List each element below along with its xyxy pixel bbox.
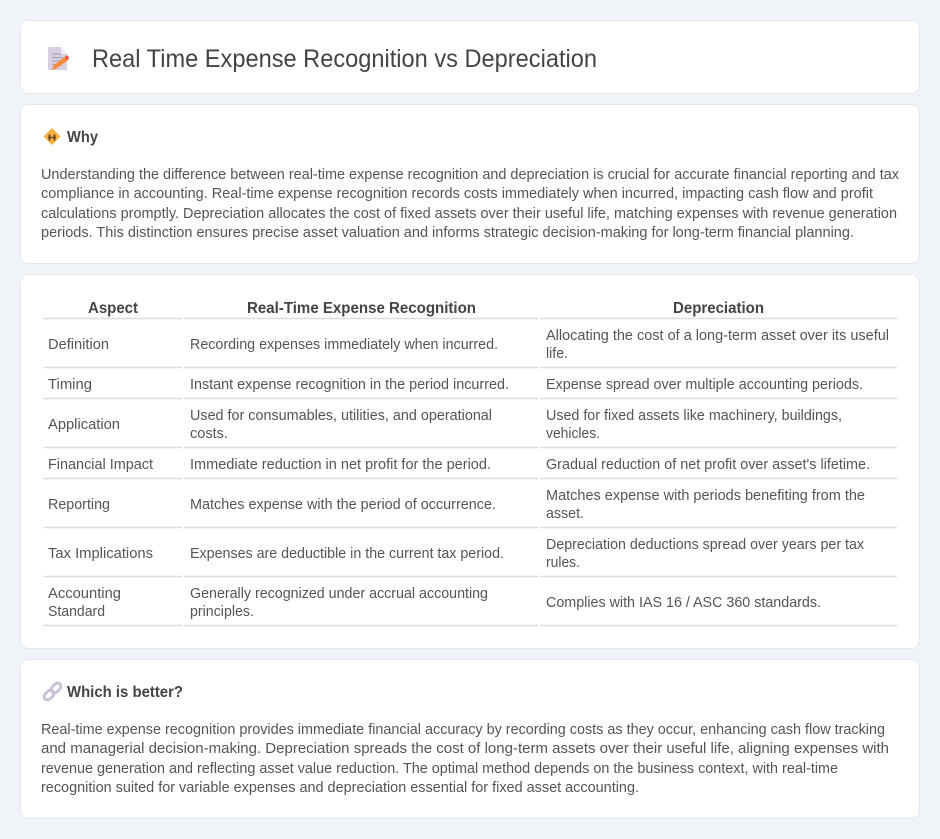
row: timing: Timing <box>48 377 92 393</box>
panel: title card <box>20 20 920 94</box>
row: definition <box>43 328 897 368</box>
text block: why <box>41 167 900 241</box>
row: financial impact: Immediate reduction in net profit for the period. <box>190 457 491 473</box>
row: tax implications: Tax Implications <box>48 546 153 562</box>
row: tax implications: Expenses are deductible in the current tax period. <box>190 546 504 562</box>
row: application: costs. <box>190 426 228 442</box>
panel: comparison table <box>20 274 920 648</box>
text block: which is better: and managerial decision-making. Depreciation spreads the cost of long-term assets over their useful life, aligning expenses with <box>41 741 889 757</box>
row: application <box>43 408 897 448</box>
text block: which is better: Real-time expense recognition provides immediate financial accuracy by recording costs as they occur, enhancing cash flow tracking <box>41 722 885 738</box>
panel: why <box>20 104 920 264</box>
row: financial impact: Financial Impact <box>48 457 153 473</box>
row: timing: Expense spread over multiple accounting periods. <box>546 377 863 393</box>
row: reporting: Matches expense with the period of occurrence. <box>190 497 496 513</box>
text block: which is better <box>41 722 889 796</box>
row: financial impact: Gradual reduction of net profit over asset's lifetime. <box>546 457 870 473</box>
row: reporting: Reporting <box>48 497 110 513</box>
row: definition: Definition <box>48 337 109 353</box>
title: Real Time Expense Recognition vs Depreciation <box>92 45 597 73</box>
table header: Aspect <box>88 300 139 317</box>
row: reporting: Matches expense with periods benefiting from the <box>546 488 865 504</box>
heading: which is better: Which is better? <box>67 684 183 701</box>
icon: chain link <box>43 682 62 701</box>
row: tax implications: rules. <box>546 555 580 571</box>
panel: which is better <box>20 660 920 818</box>
row: accounting standard: principles. <box>190 604 254 620</box>
row: reporting: asset. <box>546 506 584 522</box>
row: reporting <box>43 488 897 528</box>
table header: Depreciation <box>673 300 764 317</box>
text block: why: Understanding the difference between real-time expense recognition and depreciation is crucial for accurate financial reporting and tax <box>41 167 900 183</box>
table header: Real-Time Expense Recognition <box>247 300 476 317</box>
row: application: Used for fixed assets like machinery, buildings, <box>546 408 842 424</box>
row: application: vehicles. <box>546 426 600 442</box>
text block: why: calculations promptly. Depreciation allocates the cost of fixed assets over their useful life, matching expenses with revenue generation <box>41 206 897 222</box>
row: definition: Allocating the cost of a long-term asset over its useful <box>546 328 889 344</box>
row: timing: Instant expense recognition in the period incurred. <box>190 377 509 393</box>
table header <box>43 300 897 318</box>
icon: document with pencil <box>48 47 70 70</box>
row: accounting standard: Generally recognized under accrual accounting <box>190 586 488 602</box>
row: timing <box>43 377 897 398</box>
row: tax implications <box>43 537 897 576</box>
row: definition: life. <box>546 346 568 362</box>
text block: which is better: recognition suited for variable expenses and depreciation essential for fixed asset accounting. <box>41 780 639 796</box>
row: application: Used for consumables, utilities, and operational <box>190 408 492 424</box>
text block: which is better: revenue generation and reflecting asset value reduction. The optimal method depends on the business context, with real-time <box>41 761 838 777</box>
row: tax implications: Depreciation deductions spread over years per tax <box>546 537 865 553</box>
row: accounting standard: Standard <box>48 604 105 620</box>
row: accounting standard <box>43 586 897 626</box>
row: accounting standard: Accounting <box>48 586 121 602</box>
row: financial impact <box>43 457 897 478</box>
row: accounting standard: Complies with IAS 16 / ASC 360 standards. <box>546 595 821 611</box>
row: definition: Recording expenses immediately when incurred. <box>190 337 498 353</box>
row: application: Application <box>48 417 120 433</box>
text block: why: compliance in accounting. Real-time expense recognition records costs immediately when incurred, impacting cash flow and profit <box>41 186 873 202</box>
icon: warning diamond <box>44 129 60 144</box>
text block: why: periods. This distinction ensures precise asset valuation and informs strategic decision-making for long-term financial planning. <box>41 225 854 241</box>
heading: why: Why <box>67 129 98 146</box>
